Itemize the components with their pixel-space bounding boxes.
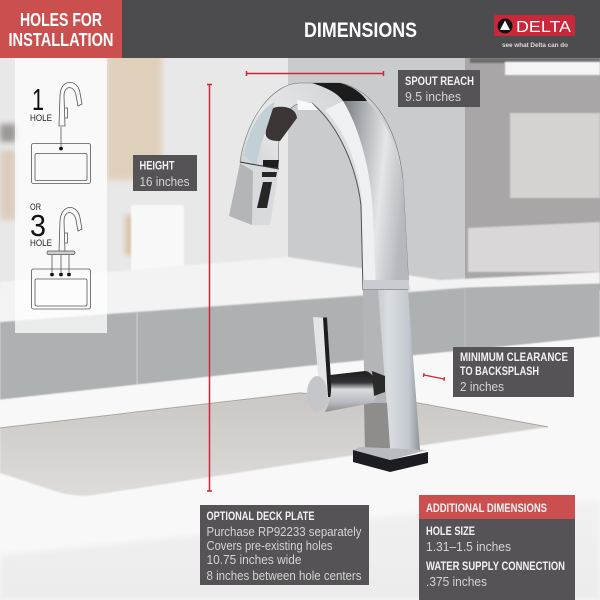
logo: Delta: see what Delta can do	[502, 42, 568, 49]
header band	[0, 0, 600, 58]
icon: 3 hole	[30, 202, 90, 309]
spout reach dimension line	[246, 71, 384, 76]
sink basin	[0, 393, 548, 496]
front counter	[0, 337, 600, 600]
vase	[131, 205, 184, 275]
label: height: HEIGHT	[140, 160, 174, 172]
label: optional deck plate: 8 inches between hole centers	[206, 569, 362, 583]
label: minimum clearance	[453, 347, 574, 397]
height dimension line	[207, 84, 212, 491]
label: spout reach: SPOUT REACH	[405, 76, 474, 88]
faucet body	[363, 280, 420, 450]
icon: 1 hole: 1	[32, 82, 44, 117]
label: optional deck plate: Purchase RP92233 separately	[206, 525, 362, 539]
label: spout reach: 9.5 inches	[405, 90, 461, 104]
heading: holes for installation: HOLES FOR	[20, 10, 102, 30]
label: minimum clearance: MINIMUM CLEARANCE	[460, 352, 568, 364]
panel: additional dimensions: .375 inches	[426, 575, 487, 589]
label: minimum clearance: 2 inches	[460, 380, 504, 394]
label: optional deck plate	[200, 505, 369, 585]
faucet	[229, 83, 428, 472]
panel: additional dimensions: ADDITIONAL DIMENSIONS	[426, 503, 547, 515]
label: height: 16 inches	[140, 175, 190, 189]
logo: Delta	[494, 15, 575, 49]
spray head	[229, 162, 279, 225]
panel: additional dimensions: HOLE SIZE	[426, 526, 475, 538]
title: DIMENSIONS	[304, 19, 417, 42]
icon: 3 hole: 3	[30, 208, 46, 243]
panel background	[15, 58, 107, 333]
panel: additional dimensions: 1.31–1.5 inches	[426, 540, 511, 554]
heading: holes for installation: INSTALLATION	[8, 30, 114, 50]
icon: 1 hole: HOLE	[30, 113, 52, 124]
panel: additional dimensions	[419, 495, 575, 600]
label: optional deck plate: Covers pre-existing holes	[206, 539, 332, 553]
heading: holes for installation	[0, 0, 122, 58]
icon: 3 hole: OR	[30, 202, 41, 213]
lower counter shade	[0, 500, 600, 600]
left panel: holes for installation	[15, 58, 107, 333]
spout	[240, 83, 409, 290]
label: optional deck plate: 10.75 inches wide	[206, 553, 302, 567]
label: minimum clearance: TO BACKSPLASH	[460, 366, 539, 378]
label: spout reach	[398, 70, 480, 107]
panel: additional dimensions: WATER SUPPLY CONNECTION	[426, 561, 565, 573]
handle	[307, 317, 385, 412]
cabinets	[0, 284, 600, 400]
back counter	[0, 257, 600, 322]
clearance dimension line	[424, 373, 444, 381]
icon: 3 hole: HOLE	[30, 238, 52, 249]
label: height	[133, 155, 197, 191]
deck base	[353, 447, 428, 472]
logo: Delta: DELTA	[516, 19, 572, 36]
icon: 1 hole	[30, 82, 90, 184]
label: optional deck plate: OPTIONAL DECK PLATE	[206, 511, 315, 523]
